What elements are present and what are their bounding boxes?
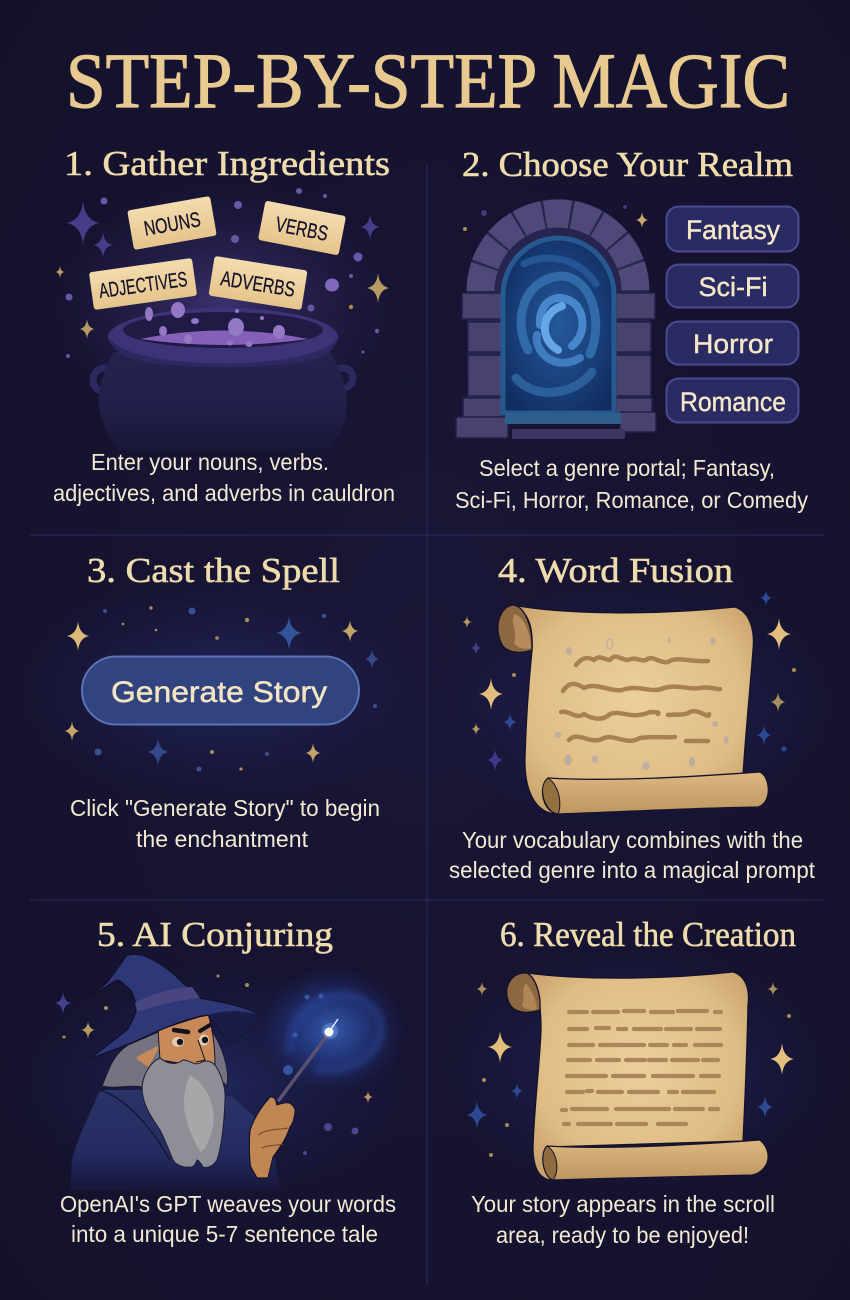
description: step 2: Select a genre portal; Fantasy, <box>479 455 775 481</box>
wand <box>279 1033 329 1100</box>
heading: step 5: 5. AI Conjuring <box>97 915 333 954</box>
hat brim underside <box>208 1011 260 1043</box>
word cards <box>89 196 346 310</box>
glow behind cauldron <box>47 180 397 430</box>
description: step 3 <box>70 795 380 852</box>
steam bubbles <box>145 302 285 347</box>
card: verbs: VERBS <box>274 213 330 246</box>
button: sci-fi: Sci-Fi <box>698 272 768 302</box>
card: nouns <box>127 196 217 250</box>
panel: step 2 choose your realm <box>455 145 808 513</box>
wizard hat <box>88 954 260 1059</box>
card: adverbs <box>208 256 308 310</box>
panel: step 1 gather ingredients <box>47 144 397 506</box>
robe <box>70 1090 280 1190</box>
description: step 5 <box>60 1191 396 1247</box>
right pillar stones <box>616 293 656 432</box>
button: romance <box>666 378 798 422</box>
beard <box>142 1058 225 1167</box>
description: step 1: adjectives, and adverbs in cauldron <box>53 480 395 506</box>
sparkles and stars <box>64 606 380 772</box>
glow of wand magic <box>5 965 415 1205</box>
heading: step 6: 6. Reveal the Creation <box>500 915 796 954</box>
description: step 5: into a unique 5-7 sentence tale <box>71 1221 378 1247</box>
generate story button <box>82 656 359 724</box>
sparkles <box>55 974 372 1155</box>
genre buttons <box>666 206 798 422</box>
wand tip <box>322 1019 338 1039</box>
portal swirl <box>516 258 596 392</box>
button: romance: Romance <box>680 387 786 417</box>
heading: step 2: 2. Choose Your Realm <box>462 145 793 184</box>
hat band <box>135 987 200 1012</box>
hand <box>249 1097 295 1178</box>
heading: step 4: 4. Word Fusion <box>498 551 733 590</box>
button: fantasy <box>666 206 798 252</box>
description: step 2 <box>455 455 808 513</box>
scroll with text lines <box>507 972 768 1180</box>
stone portal <box>456 199 656 439</box>
panel: step 5 ai conjuring <box>5 915 415 1247</box>
card: adjectives: ADJECTIVES <box>98 268 189 303</box>
description: step 2: Sci-Fi, Horror, Romance, or Comedy <box>455 487 808 513</box>
button: sci-fi <box>666 264 798 308</box>
portal steps <box>505 413 625 439</box>
scroll with squiggles <box>498 605 768 814</box>
sparkles <box>462 590 796 771</box>
description: step 5: OpenAI's GPT weaves your words <box>60 1191 396 1217</box>
sparkles <box>466 982 794 1157</box>
card: adverbs: ADVERBS <box>219 267 297 302</box>
left pillar stones <box>456 293 508 438</box>
card: nouns: NOUNS <box>142 208 202 241</box>
description: step 4: Your vocabulary combines with the <box>462 827 803 853</box>
description: step 3: the enchantment <box>136 826 309 852</box>
glow behind scroll <box>435 580 845 830</box>
panel: step 6 reveal the creation <box>435 915 845 1248</box>
glow behind scroll <box>435 945 845 1195</box>
cauldron <box>93 302 353 450</box>
button: horror <box>666 322 798 364</box>
glow behind button <box>5 575 435 805</box>
generate story button: Generate Story <box>111 676 327 709</box>
heading: step 3: 3. Cast the Spell <box>87 551 340 590</box>
face <box>158 1014 215 1066</box>
description: step 6 <box>471 1191 775 1248</box>
sparkles and dots <box>56 188 389 358</box>
title: STEP-BY-STEP MAGIC <box>66 37 790 124</box>
description: step 6: area, ready to be enjoyed! <box>496 1222 749 1248</box>
button: horror: Horror <box>693 329 773 359</box>
card: verbs <box>258 201 346 255</box>
description: step 1: Enter your nouns, verbs. <box>91 449 329 475</box>
description: step 4: selected genre into a magical prompt <box>449 857 816 883</box>
panel: step 3 cast the spell <box>5 551 435 852</box>
eyes and brows <box>172 1025 210 1062</box>
description: step 4 <box>449 827 816 883</box>
description: step 6: Your story appears in the scroll <box>471 1191 775 1217</box>
wizard <box>70 954 338 1190</box>
description: step 3: Click "Generate Story" to begin <box>70 795 380 821</box>
hair <box>102 1032 165 1090</box>
panel: step 4 word fusion <box>435 551 845 883</box>
card: adjectives <box>89 258 197 310</box>
button: fantasy: Fantasy <box>686 215 780 245</box>
description: step 1 <box>53 449 395 506</box>
heading: step 1: 1. Gather Ingredients <box>64 144 390 183</box>
portal sparkles <box>463 205 648 231</box>
